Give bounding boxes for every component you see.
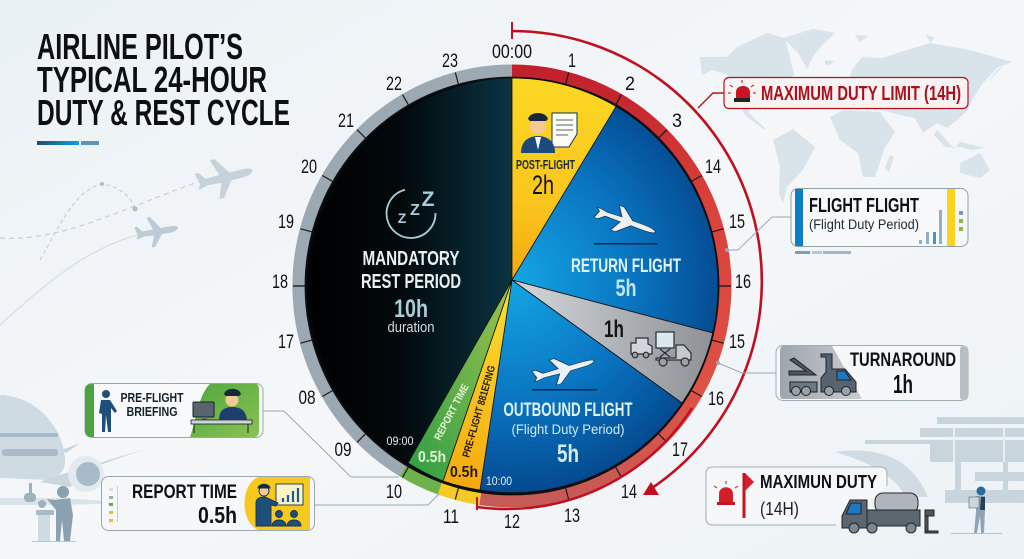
icon: ground crew with clipboard	[951, 486, 1002, 534]
turnaround wedge content	[604, 316, 691, 366]
icon: fuel tanker truck	[842, 493, 938, 533]
wedge: mandatory rest	[310, 78, 512, 463]
rest period content: duration	[388, 319, 434, 336]
callout: turnaround: 1h	[893, 369, 913, 399]
hour labels: 21	[338, 111, 354, 132]
wedge: return flight	[512, 105, 719, 333]
ring: grey rest hours	[299, 71, 512, 471]
hour labels: 12	[504, 512, 520, 533]
hour labels: 17	[672, 440, 688, 461]
ring edge	[306, 78, 718, 494]
wedge: turnaround	[512, 280, 713, 403]
icon: red siren	[728, 80, 756, 102]
callout: maximun duty: (14H)	[760, 499, 799, 519]
hour labels: 16	[735, 272, 751, 293]
rest period content: REST PERIOD	[361, 271, 461, 293]
hour labels	[272, 42, 751, 533]
hour labels: 11	[443, 507, 459, 528]
title accent bar	[37, 141, 99, 145]
ring: yellow briefing hours	[440, 488, 480, 499]
icon: sleep zzz	[387, 188, 436, 238]
callout: maximun duty: MAXIMUN DUTY	[760, 472, 877, 492]
icon: sleep zzz: Z	[410, 202, 420, 219]
post-flight content: POST-FLIGHT	[516, 157, 575, 172]
callout: report time: 0.5h	[198, 502, 237, 528]
hour labels: 20	[301, 157, 317, 178]
outbound flight content	[486, 348, 633, 488]
hour labels: 22	[386, 74, 402, 95]
callout: maximum duty limit	[698, 78, 968, 108]
narrow wedge labels: REPORT TIME	[432, 382, 472, 442]
outbound flight content: OUTBOUND FLIGHT	[504, 400, 633, 421]
title: TYPICAL 24-HOUR	[37, 59, 267, 100]
hour labels: 3	[672, 111, 682, 132]
callout: pre-flight briefing: PRE-FLIGHT	[120, 390, 184, 405]
icon: cargo loader and tug	[631, 332, 691, 366]
hour labels: 09	[334, 440, 352, 461]
wedge: report time	[408, 280, 512, 481]
callout: report time	[102, 476, 314, 530]
wedge: post-flight	[512, 78, 617, 280]
narrow wedge labels: 0.5h	[450, 464, 478, 481]
icon: sleep zzz: Z	[398, 210, 407, 226]
callout: report time: REPORT TIME	[132, 482, 237, 503]
background terminal building at right	[835, 417, 1024, 503]
hour labels: 10	[386, 482, 402, 503]
post-flight content: 2h	[532, 170, 554, 200]
outbound flight content: (Flight Duty Period)	[512, 421, 624, 437]
narrow wedge labels: 09:00	[386, 434, 414, 448]
icon: pilot presenting chart	[256, 484, 303, 526]
icon: loader truck	[789, 354, 856, 396]
narrow wedge labels: PRE-FLIGHT 881EFING	[460, 364, 498, 459]
turnaround wedge content: 1h	[604, 316, 624, 343]
clock face	[306, 78, 718, 494]
callout: pre-flight briefing	[85, 384, 263, 438]
wedge: outbound flight	[480, 280, 682, 493]
callout: flight flight	[791, 188, 968, 254]
ring: green report hours	[403, 471, 440, 488]
hour labels: 15	[729, 332, 745, 353]
outbound flight content: 10:00	[486, 474, 512, 488]
hour labels: 14	[705, 157, 721, 178]
icon: sleep zzz: Z	[422, 188, 435, 211]
callout: maximun duty	[706, 467, 887, 525]
post-flight content	[516, 113, 577, 200]
hour labels: 18	[272, 272, 288, 293]
outbound flight content: 5h	[557, 440, 579, 468]
ring: red duty hours	[480, 71, 725, 501]
title	[37, 26, 290, 133]
return flight content	[571, 199, 681, 302]
narrow wedge labels: 0.5h	[418, 449, 446, 466]
title: AIRLINE PILOT’S	[37, 26, 243, 67]
pie clock	[293, 71, 731, 501]
callout: flight flight: (Flight Duty Period)	[809, 216, 919, 232]
rest period content: MANDATORY	[362, 248, 460, 270]
hour labels: 23	[442, 51, 458, 72]
icon: white plane departing	[530, 348, 598, 391]
hour labels: 1	[568, 51, 576, 72]
hour labels: 15	[729, 212, 745, 233]
wedge: pre-flight briefing	[443, 280, 512, 490]
callout: pre-flight briefing: BRIEFING	[126, 404, 178, 419]
hour labels: 00:00	[492, 42, 532, 63]
callout: turnaround	[776, 346, 968, 400]
icon: standing figure	[99, 390, 117, 432]
background airliner and agent at left	[0, 395, 145, 542]
return flight content: RETURN FLIGHT	[571, 256, 681, 277]
hour labels: 16	[708, 389, 724, 410]
hour labels: 13	[564, 506, 580, 527]
rest period content	[361, 188, 461, 336]
icon: pilot at desk	[191, 389, 252, 433]
callout: turnaround: TURNAROUND	[850, 350, 956, 371]
flight paths and background planes	[0, 151, 257, 325]
callout: maximum duty limit: MAXIMUM DUTY LIMIT (14H)	[761, 83, 961, 105]
hour labels: 2	[625, 74, 635, 95]
return flight content: 5h	[616, 275, 636, 302]
connector lines	[263, 217, 791, 505]
title: DUTY & REST CYCLE	[37, 92, 290, 133]
icon: siren and flag	[714, 473, 754, 518]
rest period content: 10h	[394, 295, 428, 323]
icon: pilot with document	[521, 113, 577, 153]
world map	[700, 29, 1012, 203]
callout: flight flight: FLIGHT FLIGHT	[809, 195, 919, 217]
hour labels: 17	[278, 332, 294, 353]
narrow wedge labels	[386, 364, 498, 481]
hour labels: 19	[278, 212, 294, 233]
maximum duty arc arrow	[477, 22, 762, 510]
hour labels: 14	[621, 482, 637, 503]
icon: white plane landing	[592, 199, 660, 245]
hour labels: 08	[298, 388, 316, 409]
